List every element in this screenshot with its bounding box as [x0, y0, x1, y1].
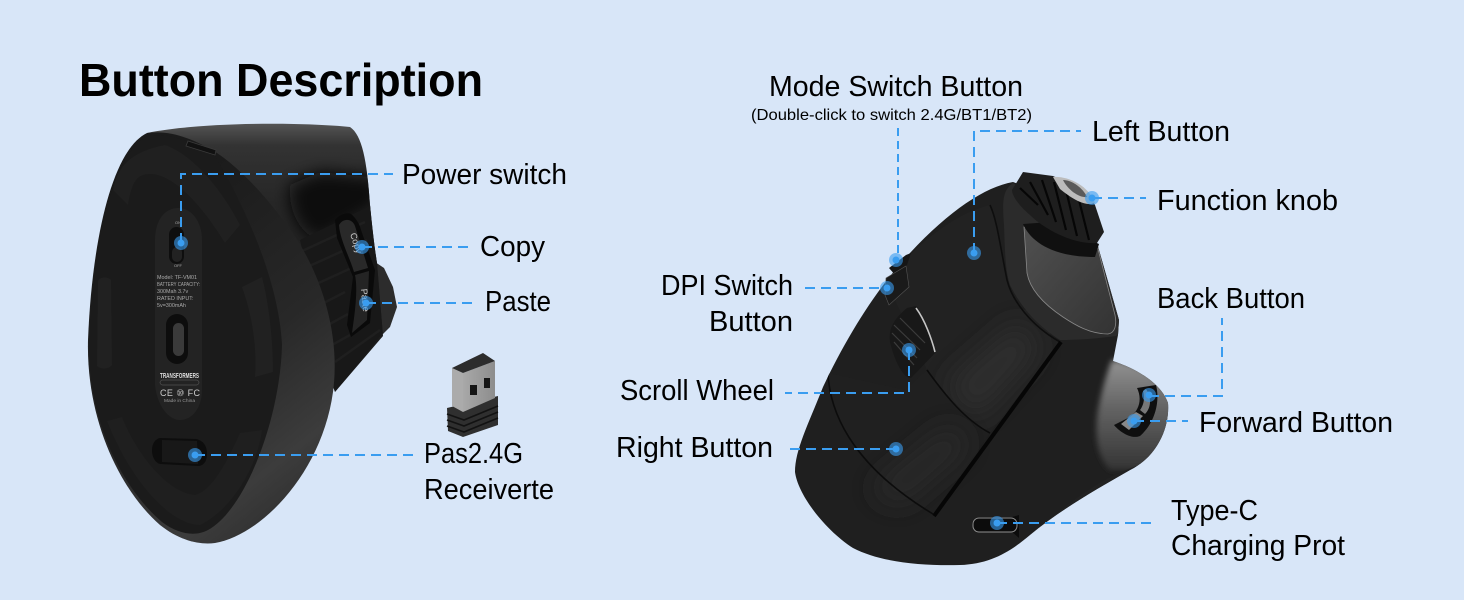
plate text: [157, 220, 200, 309]
callout: type-c charging port: Charging Prot: [1171, 530, 1345, 562]
panel and button seams: [990, 205, 1060, 342]
button labels: Copy: [348, 232, 364, 255]
base inner face: [89, 135, 282, 534]
left button panel: [895, 205, 1060, 433]
left mouse: underside view: [88, 120, 397, 543]
title: Button Description: [79, 54, 483, 106]
foot pads: [113, 145, 240, 243]
callout: mode switch button: (Double-click to switch 2.4G/BT1/BT2): [751, 107, 1032, 124]
type-c port: [972, 515, 1019, 538]
callout: 2.4G receiver: Pas2.4G: [424, 438, 523, 470]
callout: right button: Right Button: [616, 432, 773, 464]
plate text: OFF: [174, 263, 183, 268]
callout: scroll wheel: Scroll Wheel: [620, 375, 774, 407]
knob cap: [1053, 177, 1095, 204]
callout: 2.4G receiver: [188, 438, 554, 506]
knob ridges: [1012, 172, 1104, 243]
dial panel: [1024, 227, 1116, 334]
body silhouette and shading: [795, 182, 1168, 566]
power slider: [169, 227, 184, 264]
callout: dpi switch button: [661, 270, 894, 338]
callout: forward button: Forward Button: [1199, 407, 1393, 439]
callout: dpi switch button: DPI Switch: [661, 270, 793, 302]
right button panel: [828, 373, 830, 376]
sensor: [166, 314, 188, 364]
rear slider foot: [152, 438, 207, 466]
plate text: ON: [175, 220, 181, 225]
callout: type-c charging port: Type-C: [1171, 495, 1258, 527]
mode and dpi buttons: [885, 253, 911, 305]
callout: copy: Copy: [480, 231, 545, 263]
certification marks: CE ⑩ FC: [160, 388, 200, 398]
callout: left button: Left Button: [1092, 116, 1230, 148]
knob behind body: [365, 262, 397, 342]
brand: TRANSFORMERS: [160, 371, 199, 380]
right mouse: front view: [780, 170, 1180, 570]
callout: dpi switch button: Button: [709, 306, 793, 338]
left mouse: underside view: Paste: [359, 288, 371, 312]
callout: left button: [967, 116, 1230, 260]
plate text: BATTERY CAPACITY:: [157, 282, 200, 288]
knob underside: [1023, 222, 1099, 257]
callout: paste: [359, 286, 551, 318]
plate text: 300Mah 3.7v: [157, 289, 188, 295]
copy paste buttons: [335, 213, 375, 337]
connector base: [447, 396, 498, 437]
callout: type-c charging port: [990, 495, 1345, 562]
plate text: 5v=300mAh: [157, 303, 186, 309]
base rim: [88, 132, 335, 543]
left mouse: underside view: Made in China: [164, 398, 195, 403]
thumb buttons: [1114, 385, 1157, 437]
metal plug: [452, 368, 463, 412]
callout: right button: [616, 432, 903, 464]
body behind base: [140, 120, 385, 400]
left button sheen: [962, 338, 1025, 402]
callout: back button: Back Button: [1157, 283, 1305, 315]
dial panel rim: [1003, 183, 1120, 340]
USB receiver dongle: [447, 353, 498, 437]
function knob: [1012, 172, 1104, 257]
callout: copy: [355, 231, 545, 263]
callout: 2.4G receiver: Receiverte: [424, 474, 554, 506]
callout: function knob: Function knob: [1157, 185, 1338, 217]
callout: paste: Paste: [485, 286, 551, 318]
callout: power switch: [174, 159, 567, 250]
plate text: Model: TF-VM01: [157, 275, 197, 281]
callout: mode switch button: [751, 71, 1032, 267]
callout: mode switch button: Mode Switch Button: [769, 71, 1023, 103]
label plate: [155, 208, 202, 420]
callout: back button: [1142, 283, 1305, 402]
thumb wing: [1096, 360, 1175, 470]
plate text: RATED INPUT:: [157, 296, 193, 302]
scroll wheel: [890, 306, 935, 378]
callout: scroll wheel: [620, 343, 916, 407]
type-c slot: [186, 141, 216, 155]
callout: power switch: Power switch: [402, 159, 567, 191]
